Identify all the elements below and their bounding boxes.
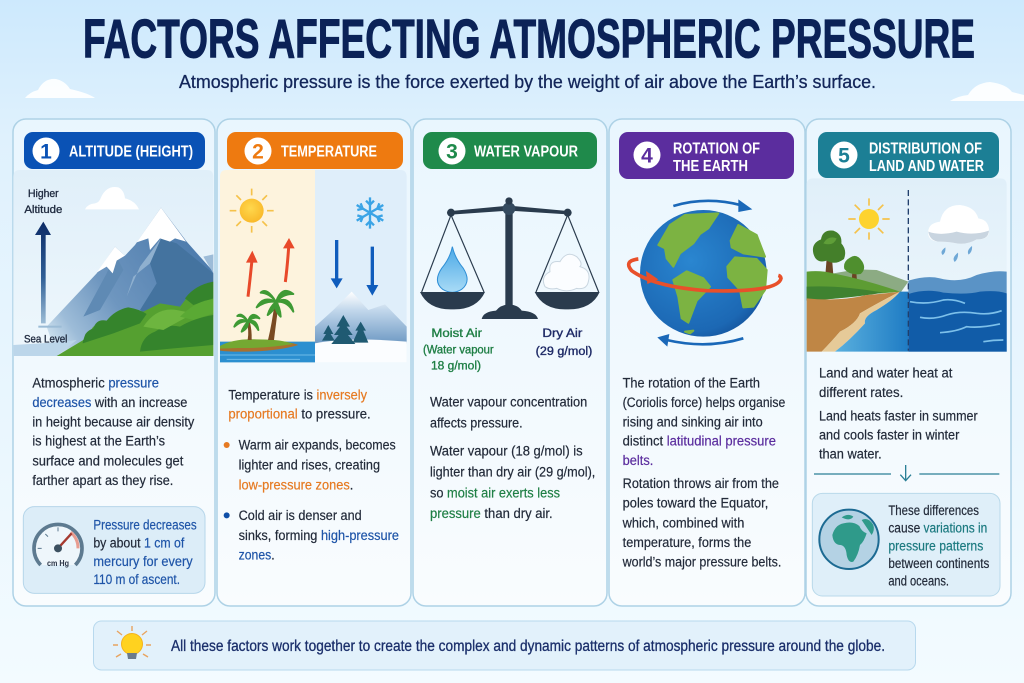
arrows: rising warm air <box>246 238 295 297</box>
text: temperature description <box>224 387 399 563</box>
heading: rotation: ROTATION OF <box>673 140 760 158</box>
footer callout: All these factors work together to create the complex and dynamic patterns of atmospheric pressure around the globe. <box>171 638 885 655</box>
arrows: sinking cold air <box>331 240 378 296</box>
illustration: mountain altitude: Higher <box>28 188 59 200</box>
text: temperature description: sinks, forming high-pressure <box>239 528 399 543</box>
callout: pressure variations: cause variations in <box>888 521 987 536</box>
heading: water vapour <box>423 132 597 169</box>
text: altitude description: decreases with an increase <box>32 395 187 410</box>
text: rotation description: which, combined with <box>622 515 744 530</box>
callout: pressure per ascent: by about 1 cm of <box>93 536 185 551</box>
icon: trees <box>813 231 864 281</box>
text: land and water description: Land and water heat at <box>819 366 953 381</box>
callout: pressure variations <box>812 493 1000 596</box>
panel: altitude <box>13 119 215 606</box>
text: land and water description <box>819 366 978 462</box>
labels: moist air: Moist Air <box>431 326 482 340</box>
heading: altitude: 1 <box>40 140 52 164</box>
cloud: top left <box>25 79 95 98</box>
illustration: mountain altitude <box>13 170 213 356</box>
callout: pressure variations: between continents <box>888 556 990 571</box>
heading: distribution <box>818 132 999 178</box>
text: temperature description: Temperature is inversely <box>228 387 367 402</box>
icon: sun <box>230 189 274 233</box>
text: temperature description: Warm air expands, becomes <box>239 438 396 453</box>
illustration: warm and cold air <box>220 170 407 362</box>
icon: barometer gauge <box>34 524 82 568</box>
labels: dry air: (29 g/mol) <box>536 344 592 358</box>
illustration: rotating globe <box>629 199 781 347</box>
icon: light bulb <box>113 626 151 659</box>
heading: rotation <box>619 132 794 179</box>
footer callout <box>94 621 916 670</box>
text: rotation description: belts. <box>623 453 653 468</box>
heading: temperature: 2 <box>252 140 264 164</box>
heading: distribution: 5 <box>838 144 850 168</box>
labels: moist air: (Water vapour <box>423 342 494 356</box>
text: land and water description: than water. <box>819 447 882 462</box>
callout: pressure per ascent: 110 m of ascent. <box>93 572 180 587</box>
icon: barometer gauge: cm Hg <box>47 559 69 568</box>
text: land and water description: Land heats faster in summer <box>819 408 978 423</box>
icon: sun <box>848 198 890 240</box>
heading: water vapour: WATER VAPOUR <box>474 144 578 160</box>
text: water vapour description: pressure than dry air. <box>430 506 553 521</box>
heading: temperature <box>227 132 403 169</box>
text: rotation description: world’s major pressure belts. <box>622 555 781 570</box>
icon: rain cloud <box>928 205 989 262</box>
panel: rotation of the earth <box>609 119 805 606</box>
labels: dry air <box>536 326 592 358</box>
heading: altitude: ALTITUDE (HEIGHT) <box>69 144 193 160</box>
text: altitude description: surface and molecules get <box>32 453 184 468</box>
text: temperature description: zones. <box>239 548 275 563</box>
callout: pressure per ascent <box>23 507 205 593</box>
callout: pressure variations: pressure patterns <box>888 538 984 553</box>
text: land and water description: and cools faster in winter <box>819 427 960 442</box>
text: water vapour description: so moist air exerts less <box>430 485 560 500</box>
text: altitude description: farther apart as they rise. <box>32 473 173 488</box>
heading: distribution: LAND AND WATER <box>869 158 984 175</box>
heading: altitude <box>24 132 205 169</box>
panel: temperature <box>217 119 411 606</box>
text: rotation description: (Coriolis force) helps organise <box>623 395 785 410</box>
illustration: balance scale <box>420 197 600 372</box>
icon: water drop <box>437 247 467 292</box>
panel: distribution of land and water <box>806 119 1011 606</box>
subtitle: Atmospheric pressure is the force exerted by the weight of air above the Earth’s surface. <box>179 71 876 92</box>
text: water vapour description: Water vapour (18 g/mol) is <box>430 443 583 458</box>
text: rotation description: Rotation throws air from the <box>623 476 779 491</box>
text: temperature description: low-pressure zones. <box>239 477 353 492</box>
illustration: mountain altitude: Sea Level <box>24 334 67 346</box>
callout: pressure per ascent: mercury for every <box>93 554 193 569</box>
heading: rotation: THE EARTH <box>673 158 748 175</box>
labels: moist air <box>423 326 494 372</box>
text: temperature description: proportional to pressure. <box>228 407 371 422</box>
text: rotation description: temperature, forms the <box>623 535 751 550</box>
text: temperature description: lighter and rises, creating <box>239 457 380 472</box>
text: water vapour description: Water vapour concentration <box>430 395 587 410</box>
text: land and water description: different rates. <box>819 385 903 400</box>
icon: cloud <box>543 254 589 291</box>
text: altitude description: Atmospheric pressure <box>32 376 159 391</box>
heading: rotation: 4 <box>641 144 653 168</box>
heading: water vapour: 3 <box>446 140 458 164</box>
icon: snowflake <box>357 197 383 229</box>
text: altitude description: in height because air density <box>32 414 195 429</box>
arrow: divider down <box>814 465 999 481</box>
text: altitude description: is highest at the Earth’s <box>32 434 165 449</box>
callout: pressure variations: These differences <box>888 503 979 518</box>
callout: pressure variations: and oceans. <box>888 574 949 589</box>
text: rotation description: distinct latitudinal pressure <box>623 434 776 449</box>
icon: globe <box>819 510 879 569</box>
text: rotation description: The rotation of the Earth <box>623 376 760 391</box>
text: water vapour description <box>430 395 595 521</box>
text: rotation description: rising and sinking air into <box>623 414 763 429</box>
illustration: land and sea <box>807 178 1007 352</box>
icon: palm trees <box>234 291 293 340</box>
text: water vapour description: affects pressure. <box>430 415 523 430</box>
cloud: top right <box>950 82 1024 101</box>
labels: dry air: Dry Air <box>542 326 582 340</box>
heading: temperature: TEMPERATURE <box>281 144 377 160</box>
panel: water vapour <box>413 119 607 606</box>
text: rotation description <box>622 376 785 570</box>
callout: pressure per ascent: Pressure decreases <box>93 517 197 532</box>
text: temperature description: Cold air is denser and <box>239 508 362 523</box>
text: water vapour description: lighter than dry air (29 g/mol), <box>430 464 595 479</box>
heading: distribution: DISTRIBUTION OF <box>869 140 982 158</box>
text: altitude description <box>32 376 195 488</box>
illustration: mountain altitude: Altitude <box>24 204 62 216</box>
labels: moist air: 18 g/mol) <box>431 358 481 372</box>
text: rotation description: poles toward the Equator, <box>623 496 768 511</box>
